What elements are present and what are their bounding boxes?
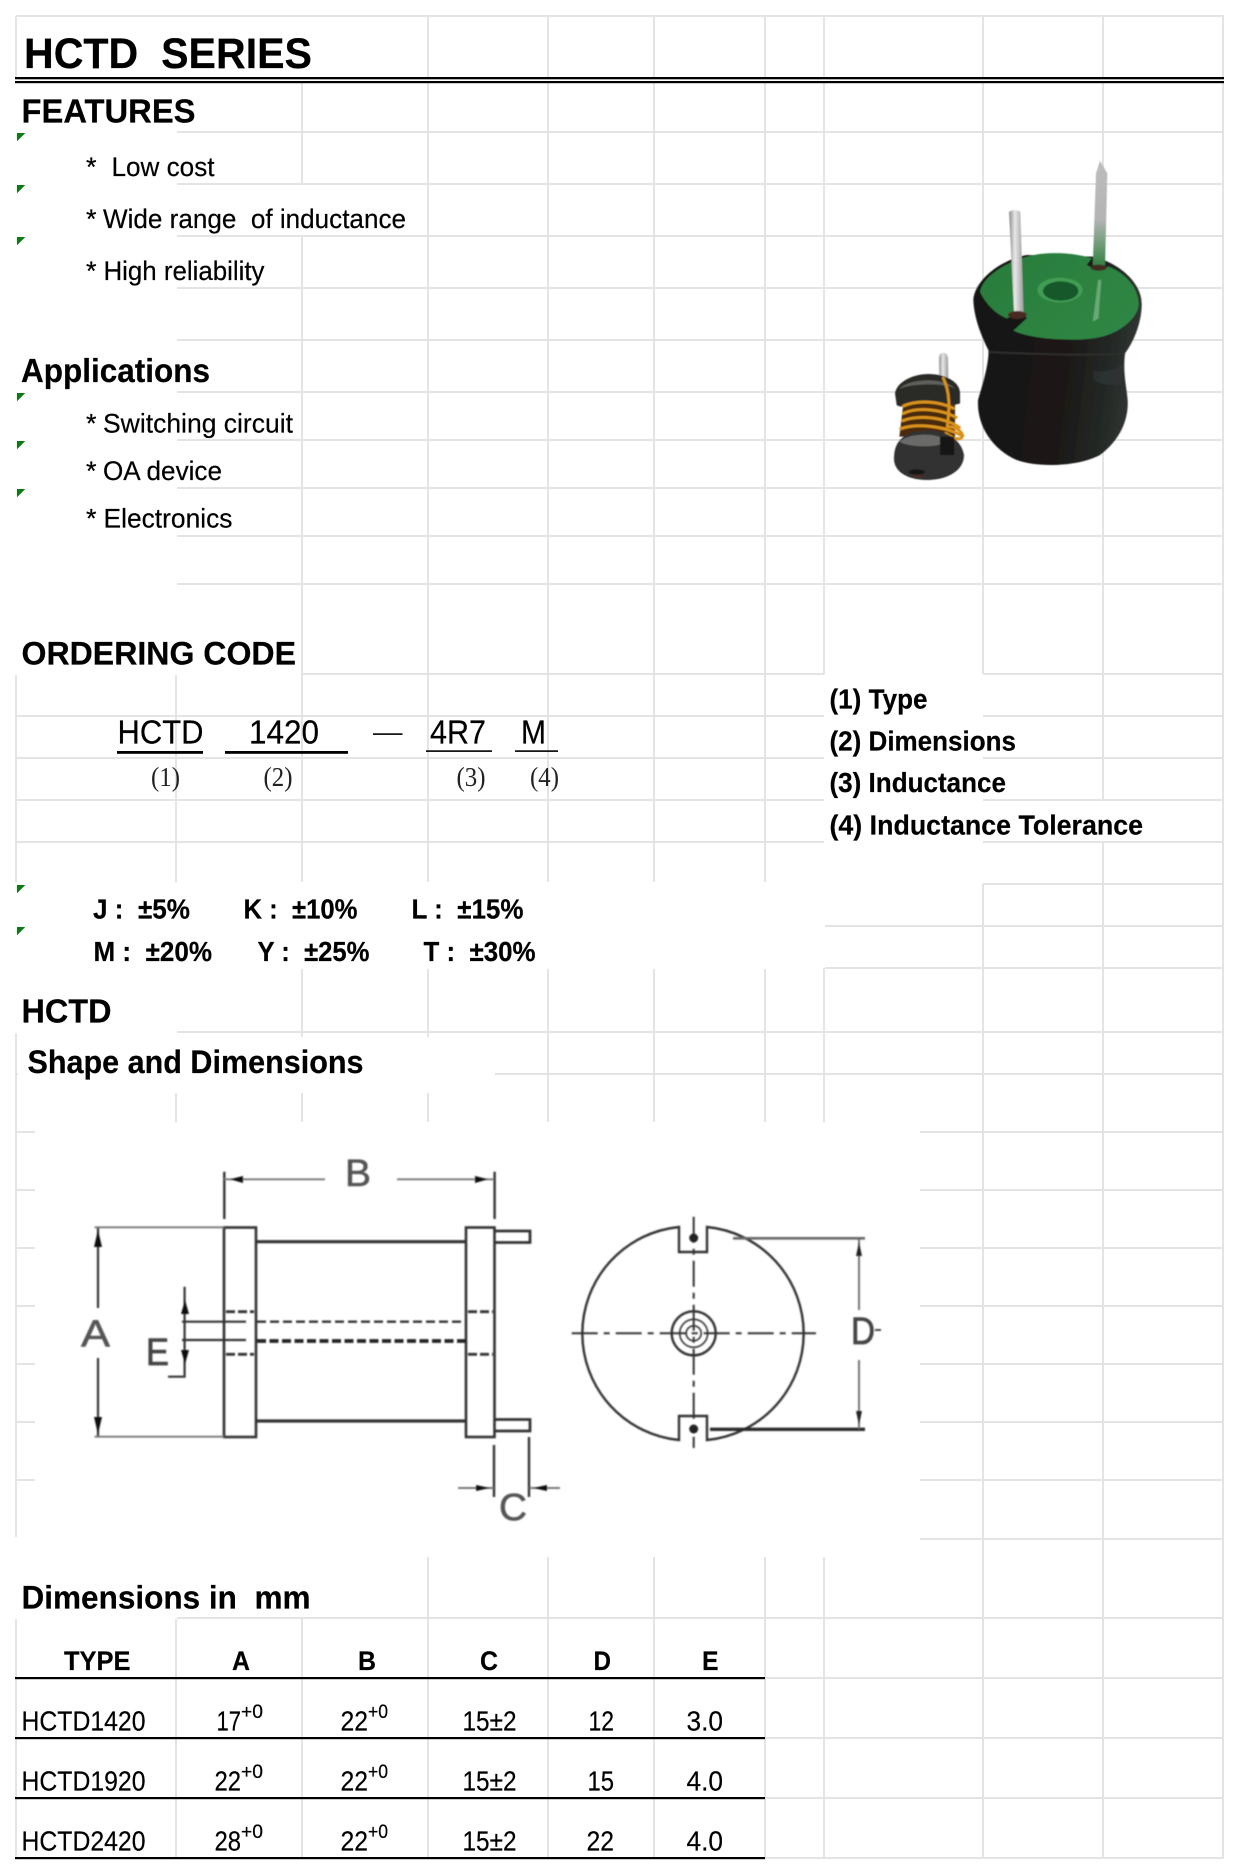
legend: code parts: (4) Inductance Tolerance — [830, 809, 1143, 840]
ordering code diagram — [117, 713, 559, 792]
dimension B — [224, 1153, 495, 1219]
features list: Low cost — [112, 152, 215, 182]
inductance tolerance codes: L : ±15% — [412, 893, 524, 924]
row HCTD2420: 15±2 — [462, 1826, 516, 1857]
applications list: * — [86, 504, 97, 534]
ordering code diagram: M — [521, 713, 546, 750]
lower pin — [494, 1420, 530, 1431]
dimension D: D — [851, 1311, 875, 1353]
applications list: * — [86, 408, 97, 438]
ordering code diagram: HCTD — [118, 713, 204, 750]
centre hole — [1037, 278, 1083, 302]
ordering code diagram: (1) — [151, 762, 180, 792]
legend: code parts: (3) Inductance — [830, 767, 1006, 798]
row HCTD1920: 22 — [214, 1766, 241, 1797]
left flange — [224, 1228, 256, 1437]
large inductor body — [973, 255, 1142, 465]
small inductor — [894, 353, 964, 480]
row HCTD1920: +0 — [241, 1762, 263, 1783]
side view drawing — [81, 1153, 560, 1529]
large inductor green cap — [980, 253, 1139, 340]
features list: * — [86, 256, 97, 286]
row HCTD1920: 15±2 — [462, 1766, 516, 1797]
hidden bore lines — [182, 1312, 493, 1354]
dimension E — [146, 1287, 189, 1377]
inductance tolerance codes: J : ±5% — [93, 893, 190, 924]
centre lines — [572, 1217, 816, 1448]
row HCTD1920: 22 — [340, 1766, 368, 1797]
dimension D — [710, 1238, 881, 1429]
row HCTD1920: +0 — [368, 1762, 388, 1783]
table header — [15, 1646, 765, 1679]
ordering code diagram: 4R7 — [430, 713, 486, 750]
row HCTD2420: +0 — [368, 1822, 388, 1843]
ordering code diagram: (3) — [456, 762, 486, 792]
upper pin — [494, 1231, 530, 1242]
product photo: two inductors — [894, 161, 1142, 480]
row HCTD1920 — [15, 1762, 765, 1799]
row HCTD2420 — [15, 1822, 765, 1859]
features list — [86, 152, 406, 286]
heading: features: FEATURES — [22, 92, 196, 130]
heading: ordering code: ORDERING CODE — [22, 635, 296, 671]
ordering code diagram: (4) — [530, 762, 559, 792]
dimension B: B — [345, 1153, 371, 1195]
table header: B — [358, 1646, 376, 1676]
row HCTD2420: 4.0 — [686, 1826, 723, 1857]
dimension A: A — [81, 1314, 111, 1356]
row HCTD1920: 15 — [588, 1766, 614, 1797]
short pin — [1008, 210, 1027, 319]
table header: A — [232, 1646, 250, 1676]
table header: E — [702, 1646, 718, 1676]
ordering code diagram: (2) — [264, 762, 292, 792]
heading: applications: Applications — [21, 352, 210, 389]
heading: dimensions in mm: Dimensions in mm — [22, 1579, 310, 1615]
centre bore — [672, 1311, 716, 1355]
table header: D — [594, 1646, 611, 1676]
row HCTD2420: 22 — [340, 1826, 368, 1857]
row HCTD2420: +0 — [241, 1822, 263, 1843]
features list: * — [86, 204, 97, 234]
body outline with notches — [582, 1227, 804, 1440]
features list: * — [86, 152, 97, 182]
inductance tolerance codes: Y : ±25% — [258, 936, 370, 967]
ordering code diagram: 1420 — [249, 713, 319, 750]
cell error markers — [17, 133, 25, 935]
pin dots — [689, 1234, 698, 1434]
heading: shape and dimensions: Shape and Dimensions — [28, 1044, 364, 1080]
end view drawing — [572, 1217, 881, 1448]
dimension C: C — [499, 1487, 527, 1529]
row HCTD1420: 3.0 — [686, 1706, 723, 1737]
row HCTD1420 — [15, 1702, 765, 1739]
dimension E: E — [146, 1332, 169, 1374]
long pin — [1091, 161, 1107, 271]
legend: code parts: (2) Dimensions — [830, 725, 1016, 756]
inductance tolerance codes: T : ±30% — [424, 936, 536, 967]
table header: TYPE — [64, 1646, 130, 1676]
legend: code parts — [830, 683, 1143, 840]
heading: HCTD: HCTD — [22, 992, 112, 1030]
features list: High reliability — [104, 256, 265, 286]
applications list — [86, 408, 293, 534]
inductance tolerance codes: M : ±20% — [94, 936, 212, 967]
title: HCTD SERIES — [24, 30, 312, 78]
applications list: OA device — [103, 456, 222, 486]
row HCTD1420: +0 — [241, 1702, 263, 1723]
row HCTD1420: 17 — [216, 1706, 241, 1737]
applications list: Electronics — [104, 504, 232, 534]
dimension A — [81, 1227, 224, 1437]
row HCTD1420: 15±2 — [462, 1706, 516, 1737]
applications list: * — [86, 456, 97, 486]
row HCTD2420: HCTD2420 — [22, 1826, 146, 1857]
row HCTD1420: +0 — [368, 1702, 388, 1723]
dimension C — [458, 1437, 560, 1529]
row HCTD2420: 28 — [214, 1826, 241, 1857]
core outline — [256, 1242, 466, 1421]
legend: code parts: (1) Type — [830, 683, 928, 714]
features list: Wide range of inductance — [103, 204, 406, 234]
inductance tolerance codes — [93, 893, 536, 967]
row HCTD1420: 22 — [340, 1706, 368, 1737]
row HCTD2420: 22 — [586, 1826, 614, 1857]
table header: C — [480, 1646, 498, 1676]
row HCTD1420: HCTD1420 — [22, 1706, 146, 1737]
row HCTD1920: 4.0 — [686, 1766, 723, 1797]
row HCTD1920: HCTD1920 — [22, 1766, 146, 1797]
inductance tolerance codes: K : ±10% — [244, 893, 358, 924]
row HCTD1420: 12 — [588, 1706, 614, 1737]
applications list: Switching circuit — [103, 408, 293, 438]
dimensions table — [15, 1646, 765, 1859]
right flange — [466, 1228, 494, 1437]
